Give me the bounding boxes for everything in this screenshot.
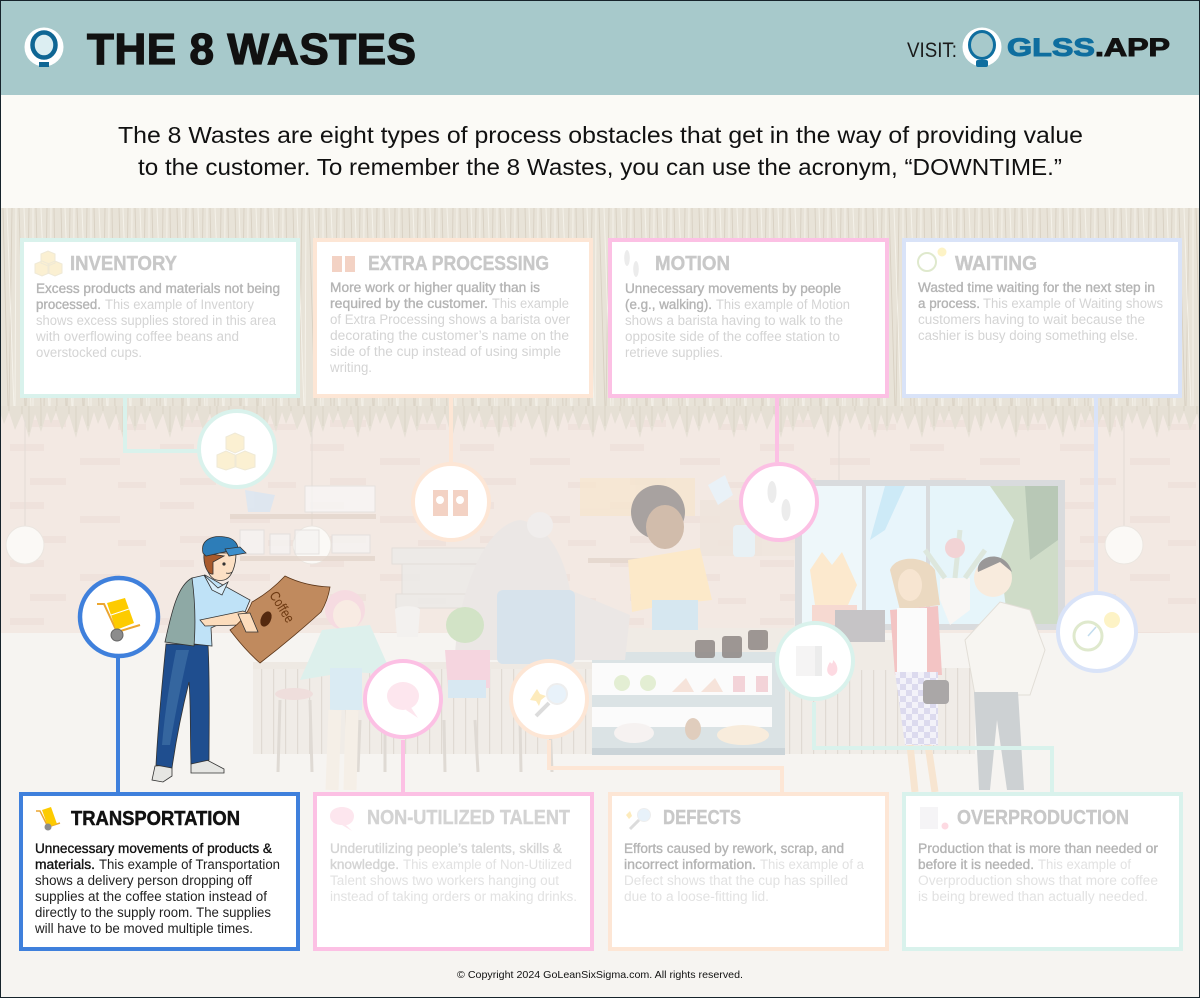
pendant lights xyxy=(6,420,1143,564)
woman customer xyxy=(890,559,949,792)
icon: lightbulb logo xyxy=(24,28,64,67)
counter xyxy=(253,628,975,754)
body text xyxy=(625,281,850,360)
circle: defects xyxy=(511,661,587,737)
body text xyxy=(330,841,577,904)
shelves and cups xyxy=(230,478,795,608)
body text: Overproduction shows that more coffee xyxy=(918,873,1158,888)
panel: defects xyxy=(610,794,887,949)
body text: This example of Waiting shows xyxy=(983,296,1163,311)
body text: (e.g., walking). xyxy=(625,297,712,312)
panel: overproduction xyxy=(904,794,1181,949)
body text: instead of taking orders or making drinks. xyxy=(330,889,577,904)
pour-over coffee set xyxy=(695,630,768,658)
circle: motion xyxy=(741,464,817,540)
jeans xyxy=(156,644,209,768)
body text: of Extra Processing shows a barista over xyxy=(330,312,570,327)
heading: DEFECTS xyxy=(663,807,741,829)
body text: This example of Non-Utilized xyxy=(403,857,572,872)
icon: magnifying glass xyxy=(626,808,650,829)
heading: WAITING xyxy=(955,253,1037,275)
stools xyxy=(275,688,552,772)
brick wall xyxy=(0,404,1200,633)
icon: hand cart xyxy=(36,807,60,830)
body text xyxy=(34,841,280,936)
body text: before it is needed. xyxy=(918,857,1034,872)
circle: inventory xyxy=(199,411,275,487)
coffee shop scene background xyxy=(0,208,1200,792)
intro panel: The 8 Wastes are eight types of process obstacles that get in the way of providing value xyxy=(118,122,1083,148)
jar and milk carton xyxy=(708,475,755,557)
heading: MOTION xyxy=(655,253,730,275)
body text: directly to the supply room. The supplies xyxy=(35,905,271,920)
man customer xyxy=(965,557,1045,790)
website link: .APP xyxy=(1095,34,1170,62)
icon: two cups xyxy=(332,256,355,272)
body text: More work or higher quality than is xyxy=(330,280,540,295)
heading: NON-UTILIZED TALENT xyxy=(367,807,570,829)
body text: Wasted time waiting for the next step in xyxy=(918,280,1155,295)
body text: knowledge. xyxy=(330,857,399,872)
body text: Unnecessary movements by people xyxy=(625,281,841,296)
body text xyxy=(35,281,280,360)
copyright: © Copyright 2024 GoLeanSixSigma.com. All rights reserved. xyxy=(457,969,743,981)
body text: with overflowing coffee beans and xyxy=(35,329,239,344)
body text: Excess products and materials not being xyxy=(36,281,280,296)
icon: footprints xyxy=(624,250,639,277)
vase and flowers xyxy=(925,530,985,625)
website link xyxy=(907,28,1170,67)
icon: boxes xyxy=(35,251,62,276)
body text: is being brewed than actually needed. xyxy=(918,889,1148,904)
icon: clock xyxy=(918,248,946,271)
body text: shows excess supplies stored in this area xyxy=(36,313,276,328)
body text: writing. xyxy=(329,360,372,375)
coffee sack xyxy=(230,576,330,663)
intro panel: to the customer. To remember the 8 Wastes, you can use the acronym, “DOWNTIME.” xyxy=(138,154,1062,180)
body text: This example of Transportation xyxy=(99,857,280,872)
website link: GLSS xyxy=(1007,34,1095,62)
panel: non-utilized talent xyxy=(315,794,592,949)
heading: INVENTORY xyxy=(70,253,178,275)
body text: cashier is busy doing something else. xyxy=(918,328,1138,343)
intro panel xyxy=(0,95,1200,208)
body text: materials. xyxy=(35,857,95,872)
pink hair girl character xyxy=(300,590,392,790)
header band xyxy=(0,0,1200,95)
circle: waiting xyxy=(1058,593,1136,671)
body text: Underutilizing people’s talents, skills & xyxy=(330,841,562,856)
body text: supplies at the coffee station instead of xyxy=(35,889,267,904)
body text: incorrect information. xyxy=(624,857,756,872)
panel: waiting xyxy=(904,240,1180,396)
arms xyxy=(200,611,256,628)
body text: This example of a xyxy=(760,857,864,872)
body text: will have to be moved multiple times. xyxy=(34,921,253,936)
body text: This example of Motion xyxy=(716,297,850,312)
body text xyxy=(918,280,1163,343)
circle: extra processing xyxy=(413,464,489,540)
circle: overproduction xyxy=(777,623,853,699)
body text: Unnecessary movements of products & xyxy=(35,841,272,856)
body text: opposite side of the coffee station to xyxy=(625,329,840,344)
shirt xyxy=(165,575,250,646)
thatched roof xyxy=(0,208,1200,440)
hand xyxy=(238,613,258,632)
icon: coffee and flame xyxy=(920,807,948,830)
body text: shows a delivery person dropping off xyxy=(35,873,252,888)
circle: non-utilized talent xyxy=(365,661,441,737)
body text: customers having to wait because the xyxy=(918,312,1145,327)
body text: Talent shows two workers hanging out xyxy=(330,873,559,888)
body text: shows a barista having to walk to the xyxy=(625,313,843,328)
body text xyxy=(918,841,1159,904)
website link: VISIT: xyxy=(907,39,957,62)
body text: Defect shows that the cup has spilled xyxy=(624,873,848,888)
window xyxy=(795,480,1065,630)
body text: This example of Inventory xyxy=(105,297,254,312)
body text: Production that is more than needed or xyxy=(918,841,1159,856)
connectors xyxy=(118,398,1096,792)
coffee sack: Coffee xyxy=(266,588,298,626)
body text: retrieve supplies. xyxy=(625,345,723,360)
icon: brain xyxy=(330,807,354,831)
panel: motion xyxy=(610,240,887,396)
body text: required by the customer. xyxy=(330,296,488,311)
panel: transportation xyxy=(21,794,298,949)
body text: a process. xyxy=(918,296,980,311)
kettle on counter xyxy=(395,606,420,637)
body text: decorating the customer’s name on the xyxy=(330,328,569,343)
panel: extra processing xyxy=(315,240,591,396)
body text: This example of xyxy=(1038,857,1131,872)
body text: processed. xyxy=(36,297,101,312)
title: THE 8 WASTES xyxy=(87,25,416,74)
heading: EXTRA PROCESSING xyxy=(368,253,549,275)
frog character xyxy=(445,607,490,698)
heading: OVERPRODUCTION xyxy=(957,807,1129,829)
body text: This example xyxy=(492,296,569,311)
body text xyxy=(624,841,864,904)
body text: due to a loose-fitting lid. xyxy=(624,889,769,904)
panel: inventory xyxy=(22,240,298,396)
shoes xyxy=(152,760,224,782)
body text xyxy=(329,280,570,375)
head xyxy=(203,537,246,580)
delivery person illustration xyxy=(152,537,330,782)
cat cashier character xyxy=(810,552,885,642)
body text: Efforts caused by rework, scrap, and xyxy=(624,841,844,856)
seal barista character xyxy=(455,512,630,664)
afro barista character xyxy=(628,485,712,630)
body text: overstocked cups. xyxy=(36,345,142,360)
heading: TRANSPORTATION xyxy=(71,808,240,830)
pastry display case xyxy=(592,652,785,755)
circle: transportation xyxy=(80,578,158,656)
body text: side of the cup instead of using simple xyxy=(330,344,561,359)
